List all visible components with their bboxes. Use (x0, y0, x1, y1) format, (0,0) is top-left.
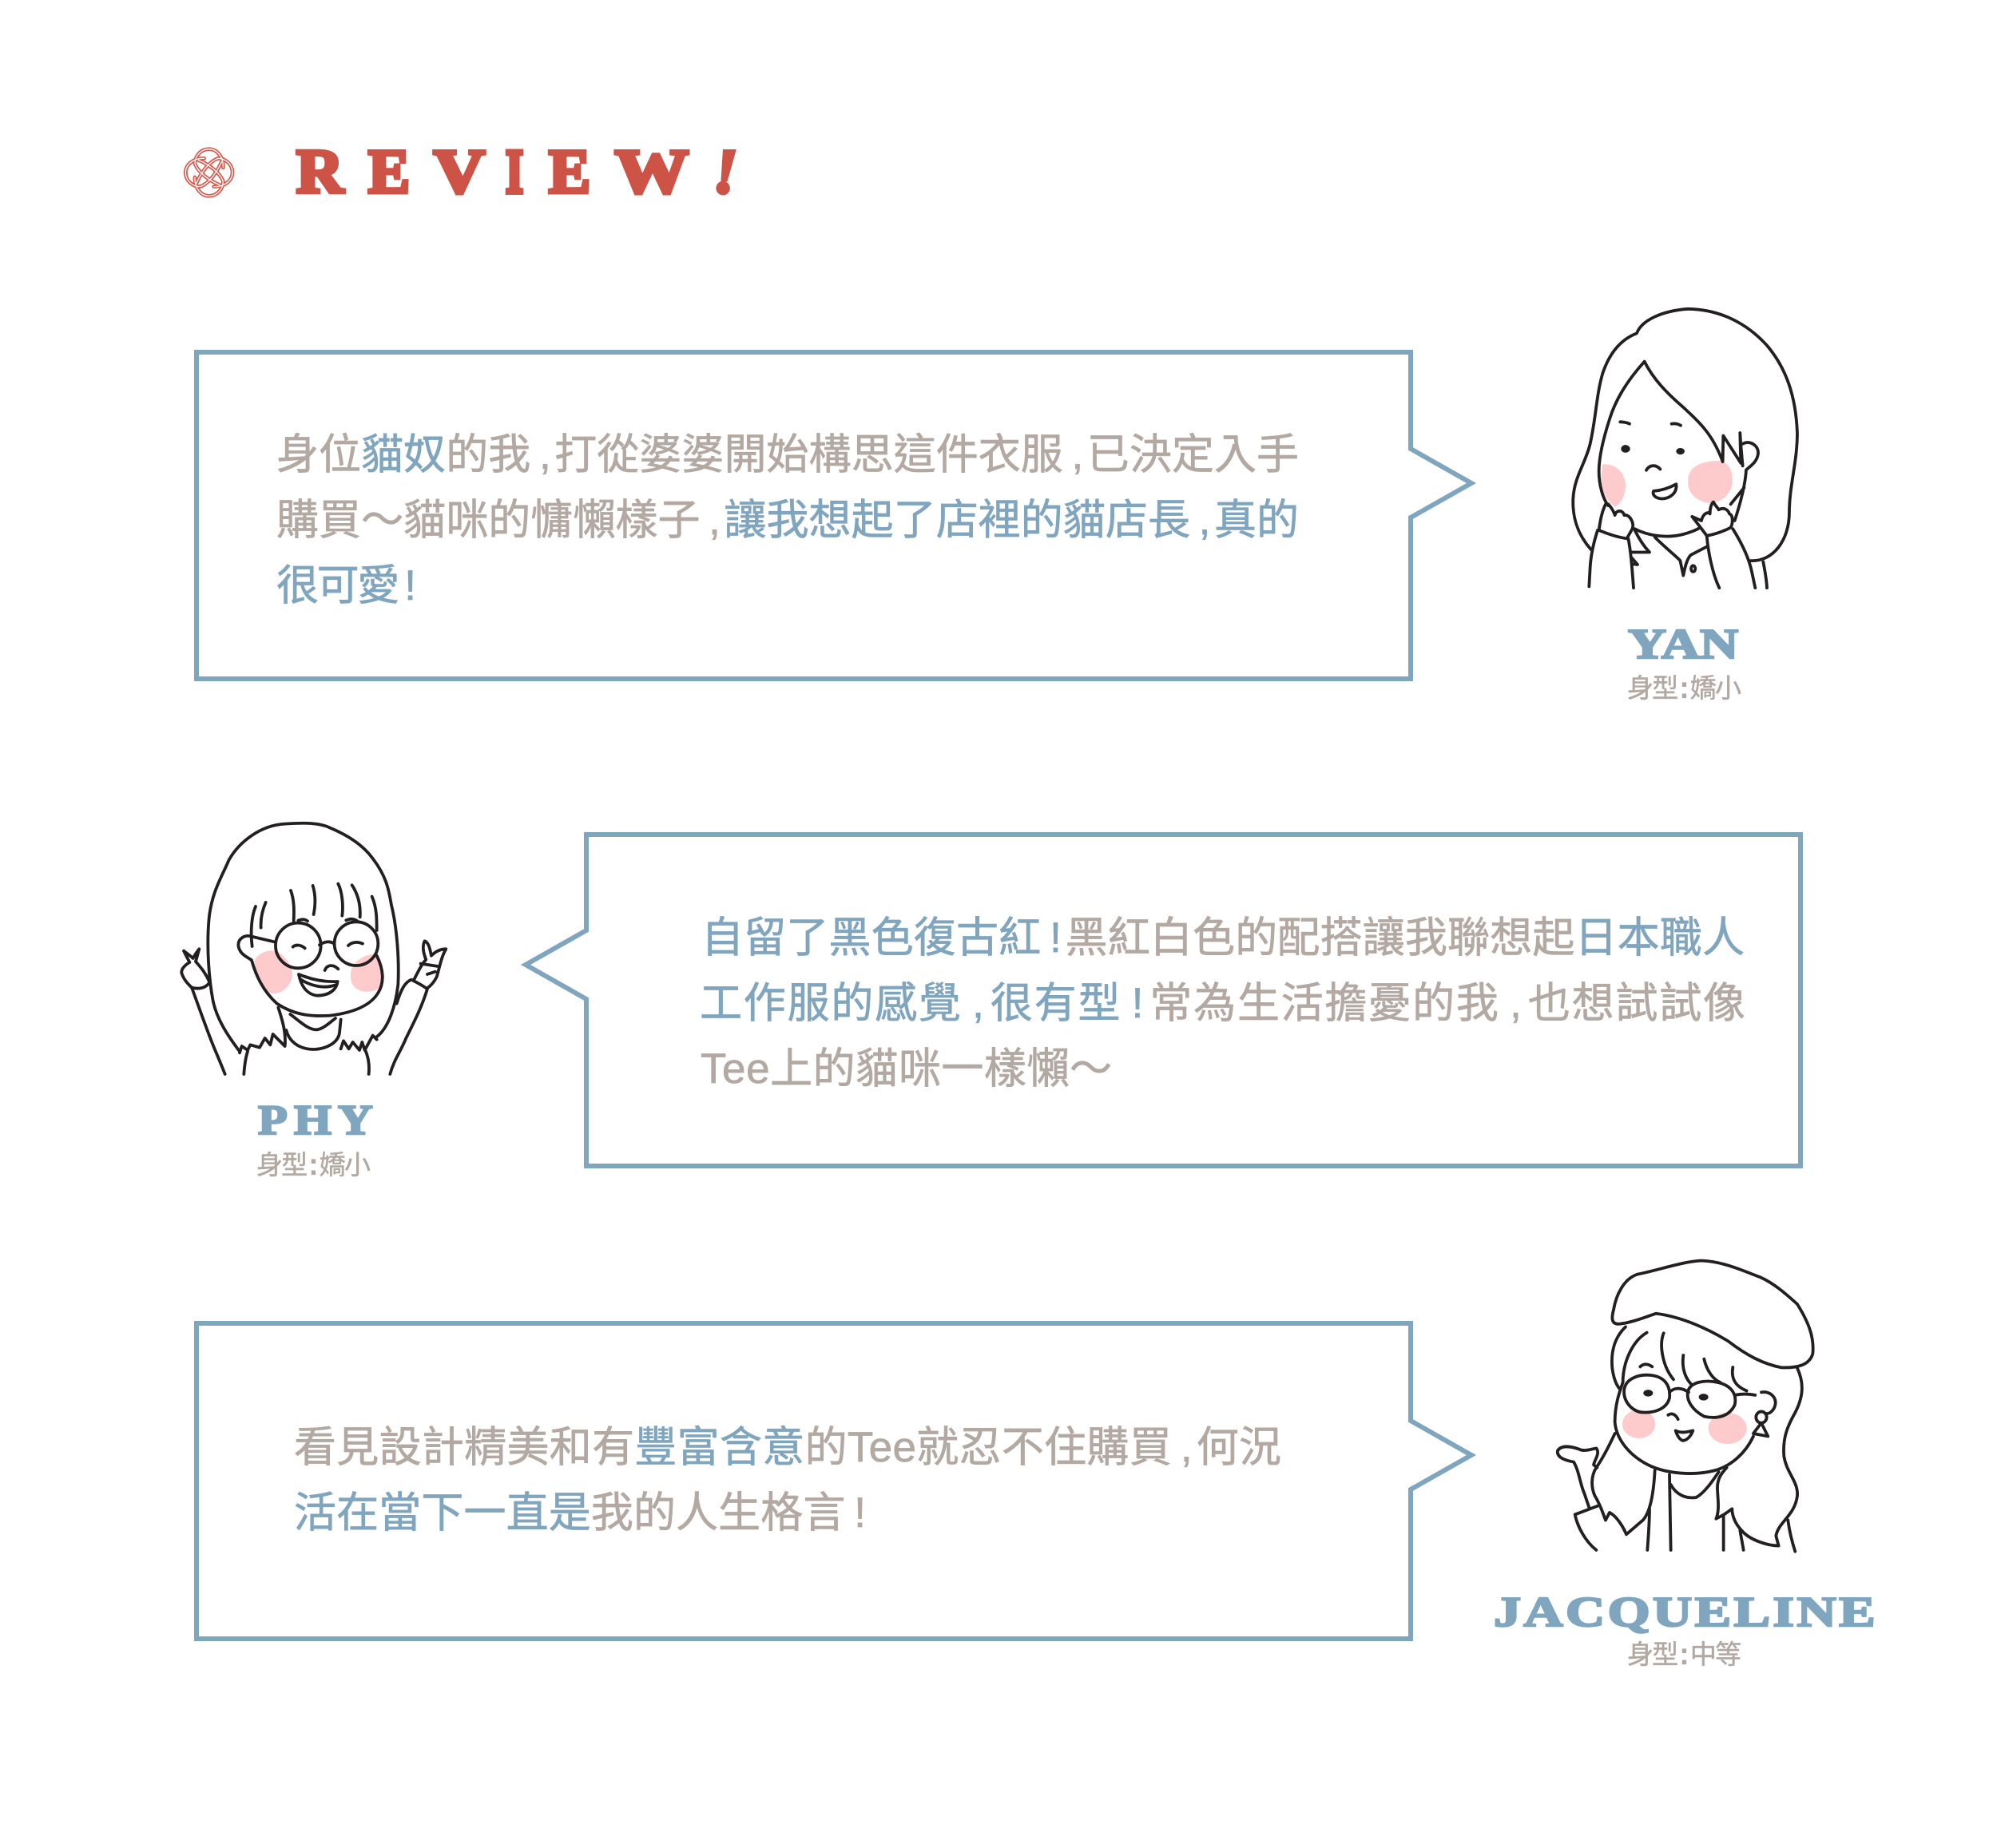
label: YAN body type: 身型 : 嬌小 (1627, 673, 1741, 703)
title: REVIEW!: W (615, 137, 689, 206)
label: PHY name: PHY (258, 1097, 373, 1144)
icon: YAN portrait (1573, 309, 1797, 588)
panel: JACQUELINE speech bubble (197, 1323, 1471, 1639)
panel: PHY speech bubble (526, 835, 1800, 1166)
text block: PHY review: 自留了黑色復古紅 ! 黑紅白色的配搭讓我聯想起日本職人 (701, 914, 1745, 962)
text block: JACQUELINE review (294, 1424, 1281, 1537)
text block: JACQUELINE review: 看見設計精美和有豐富含意的Tee就忍不住購買 , 何況 (294, 1424, 1281, 1471)
label: JACQUELINE name: JACQUELINE (1494, 1589, 1875, 1636)
text block: JACQUELINE review: 活在當下一直是我的人生格言 ! (294, 1489, 866, 1537)
title: REVIEW!: I (506, 137, 523, 206)
title: REVIEW!: ! (713, 137, 737, 206)
label: PHY body type: 身型 : 嬌小 (256, 1150, 371, 1180)
text block: YAN review: 身位貓奴的我 , 打從婆婆開始構思這件衣服 , 已決定入手 (276, 431, 1299, 478)
text block: PHY review (700, 914, 1745, 1093)
text block: PHY review: 工作服的感覺 , 很有型 ! 常為生活擔憂的我 , 也想試試像 (700, 980, 1745, 1027)
text block: YAN review: 購買～貓咪的慵懶樣子 , 讓我想起了店裡的貓店長 , 真的 (276, 497, 1299, 544)
icon: JACQUELINE portrait (1558, 1261, 1813, 1552)
icon: red knot emblem (185, 149, 232, 196)
text block: YAN review: 很可愛 ! (276, 562, 416, 609)
text block: YAN review (276, 431, 1299, 609)
title: REVIEW!: E (368, 137, 410, 206)
label: YAN name: YAN (1628, 621, 1738, 668)
title: REVIEW!: R (296, 137, 345, 206)
icon: PHY portrait (181, 823, 446, 1074)
text block: PHY review: Tee上的貓咪一樣懶～ (701, 1045, 1112, 1093)
panel: YAN speech bubble (197, 352, 1471, 679)
title: REVIEW! (296, 137, 737, 206)
title: REVIEW!: V (434, 137, 485, 206)
title: REVIEW!: E (549, 137, 590, 206)
label: JACQUELINE body type: 身型 : 中等 (1627, 1640, 1741, 1669)
